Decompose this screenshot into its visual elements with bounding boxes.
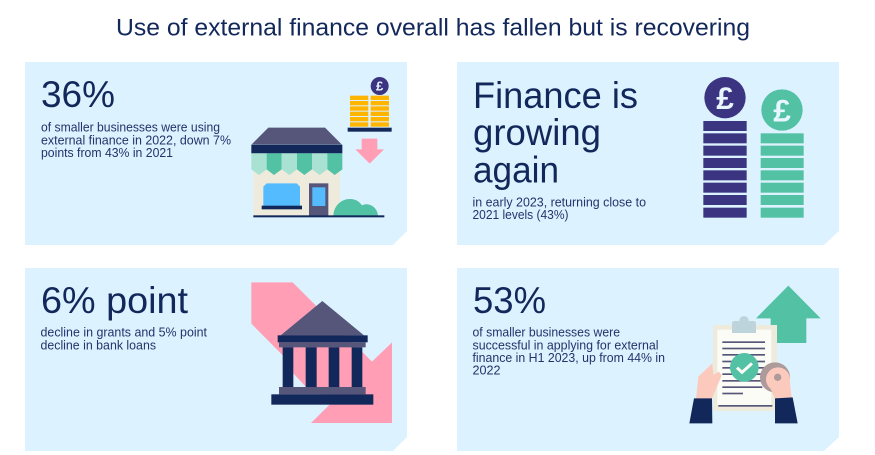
icon: two coin stacks: £	[773, 92, 791, 128]
text: success description: 2022	[472, 364, 501, 378]
panel: 6% point decline	[25, 268, 407, 451]
heading: finance is growing again: growing	[473, 112, 601, 153]
text: 36% description: external finance in 2022, down 7%	[41, 134, 231, 148]
icon: clipboard with up arrow	[689, 286, 821, 423]
icon: bank with falling arrow	[251, 282, 392, 423]
stat: 53%: 53%	[473, 280, 546, 321]
text: decline description: decline in grants and 5% point	[40, 326, 208, 340]
text: success description: successful in applying for external	[472, 338, 658, 352]
panel: 53% successful applications	[457, 268, 839, 451]
text: 36% description	[41, 120, 231, 160]
heading: finance is growing again: Finance is	[473, 75, 638, 116]
stat: 36%: 36%	[41, 74, 115, 115]
icon: two coin stacks: £	[716, 80, 734, 116]
text: success description: finance in H1 2023, up from 44% in	[472, 351, 665, 365]
stat: 6% point: 6% point	[41, 280, 189, 321]
text: success description	[472, 326, 665, 378]
text: 36% description: of smaller businesses were using	[41, 120, 220, 134]
text: growth description: 2021 levels (43%)	[472, 208, 568, 222]
text: decline description: decline in bank loans	[40, 338, 156, 352]
heading: finance is growing again	[473, 75, 638, 190]
title: Use of external finance overall has fallen but is recovering	[116, 14, 750, 42]
text: decline description	[40, 326, 208, 352]
icon: shop with falling coins: £	[376, 79, 384, 94]
text: success description: of smaller businesses were	[472, 326, 620, 340]
text: growth description: in early 2023, returning close to	[472, 196, 646, 210]
text: 36% description: points from 43% in 2021	[41, 146, 173, 160]
text: growth description	[472, 196, 646, 222]
icon: shop with falling coins	[251, 77, 392, 217]
panel: 36% of smaller businesses	[25, 62, 407, 245]
icon: two coin stacks	[703, 77, 804, 218]
heading: finance is growing again: again	[473, 150, 559, 190]
panel: finance is growing again	[457, 62, 839, 245]
